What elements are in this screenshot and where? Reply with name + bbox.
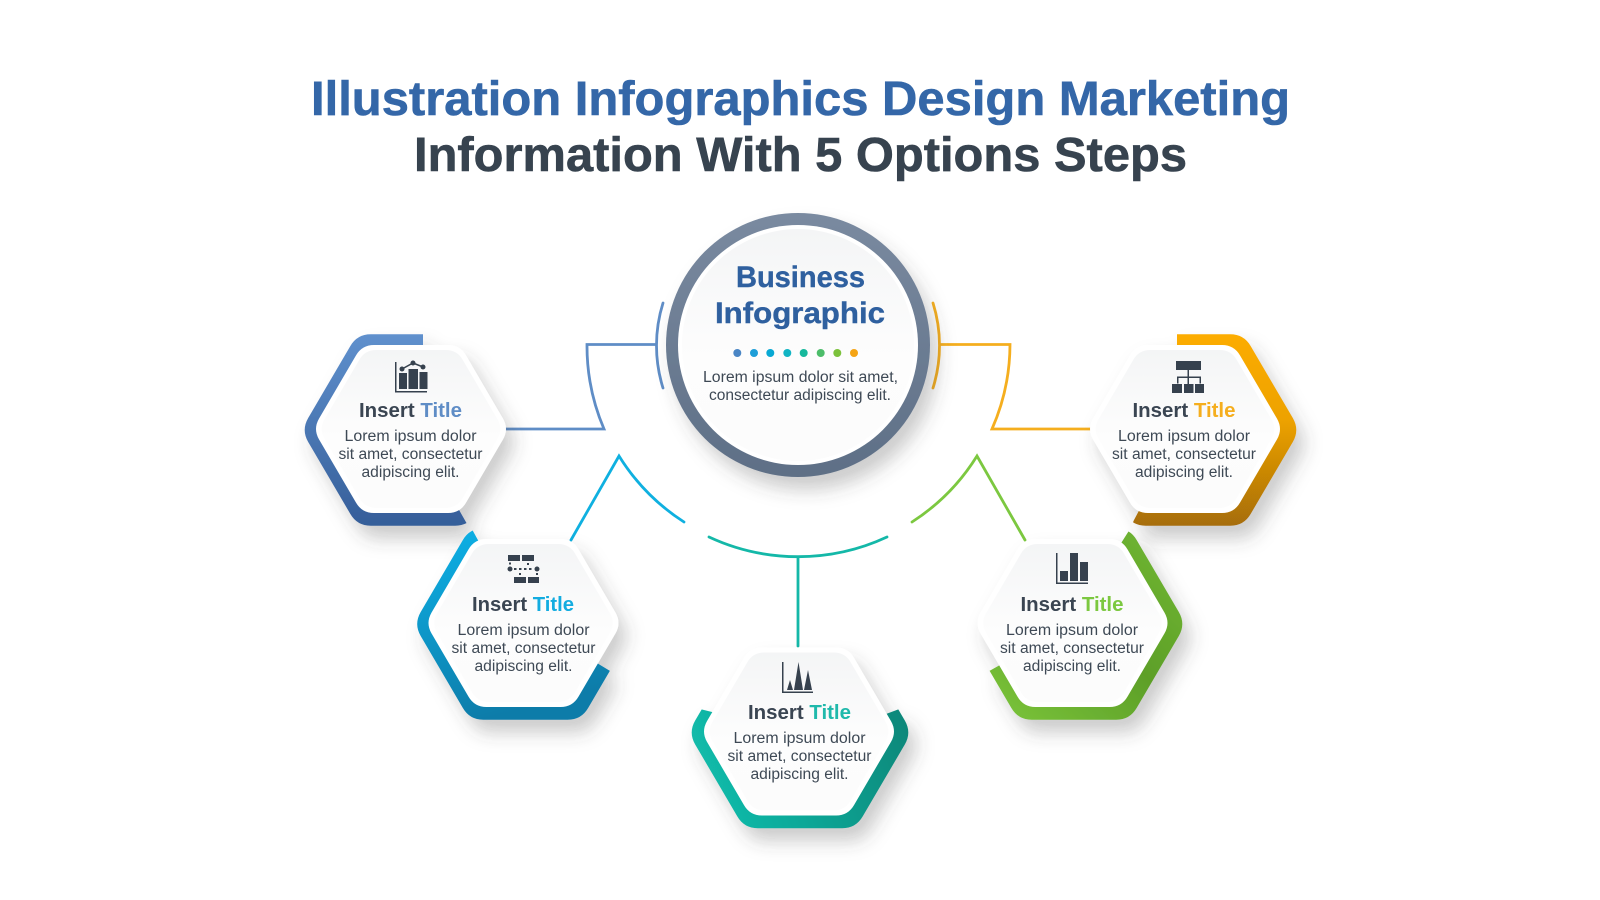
body text: Lorem ipsum dolor xyxy=(734,730,866,747)
hexagon frame xyxy=(692,637,908,828)
connector: green step 4 xyxy=(912,456,1025,540)
circle body text: consectetur adipiscing elit. xyxy=(709,387,891,404)
circle heading: Business xyxy=(736,261,865,294)
hexagon frame xyxy=(966,528,1182,720)
body text: adipiscing elit. xyxy=(474,658,572,675)
body text: Lorem ipsum dolor xyxy=(1118,428,1250,445)
connector: teal step 3 xyxy=(709,537,887,646)
connector: cyan step 2 xyxy=(571,456,684,540)
body text: sit amet, consectetur xyxy=(338,446,482,463)
hexagon frame xyxy=(417,528,634,720)
heading: Insert Title xyxy=(359,400,462,422)
icon: peak chart xyxy=(782,662,813,693)
body text: sit amet, consectetur xyxy=(1112,446,1256,463)
body text: adipiscing elit. xyxy=(750,766,848,783)
body text: adipiscing elit. xyxy=(362,464,460,481)
body text: Lorem ipsum dolor xyxy=(1006,622,1138,639)
panel: central circle xyxy=(666,213,930,477)
body text: sit amet, consectetur xyxy=(728,748,872,765)
body text xyxy=(728,730,872,783)
body text xyxy=(452,622,596,675)
body text xyxy=(338,428,482,481)
circle heading: Infographic xyxy=(715,297,885,330)
body text: Lorem ipsum dolor xyxy=(344,428,476,445)
icon: bar chart xyxy=(1056,553,1088,584)
circle body text: Lorem ipsum dolor sit amet, xyxy=(703,369,898,386)
panel: step 3 teal hexagon xyxy=(692,637,908,828)
icon: org chart xyxy=(1172,361,1204,393)
body text: Lorem ipsum dolor xyxy=(458,622,590,639)
panel: step 1 blue hexagon xyxy=(305,334,521,526)
body text xyxy=(1112,428,1256,481)
circle heading xyxy=(715,261,885,330)
connector: orange step 5 to centre xyxy=(933,303,1090,429)
heading: Insert Title xyxy=(472,594,574,616)
hexagon frame xyxy=(1080,334,1296,526)
body text: adipiscing elit. xyxy=(1135,464,1233,481)
circle body text xyxy=(703,369,898,404)
icon: bar chart with trend line xyxy=(395,360,428,392)
circle ring xyxy=(666,213,930,477)
body text xyxy=(1000,622,1144,675)
heading: Insert Title xyxy=(748,702,851,724)
hexagon frame xyxy=(305,334,521,526)
title: Illustration Infographics Design Marketing xyxy=(311,73,1290,126)
heading: Insert Title xyxy=(1132,400,1236,422)
body text: adipiscing elit. xyxy=(1023,658,1121,675)
panel: step 5 orange hexagon xyxy=(1080,334,1296,526)
body text: sit amet, consectetur xyxy=(1000,640,1144,657)
connector: blue step 1 to centre xyxy=(506,303,663,429)
heading: Insert Title xyxy=(1020,594,1124,616)
panel: step 2 cyan hexagon xyxy=(417,528,634,720)
panel: step 4 green hexagon xyxy=(966,528,1182,720)
icon: flow diagram xyxy=(508,555,540,583)
body text: sit amet, consectetur xyxy=(452,640,596,657)
coloured dots xyxy=(733,349,858,357)
title xyxy=(311,73,1290,182)
title: Information With 5 Options Steps xyxy=(414,129,1187,182)
